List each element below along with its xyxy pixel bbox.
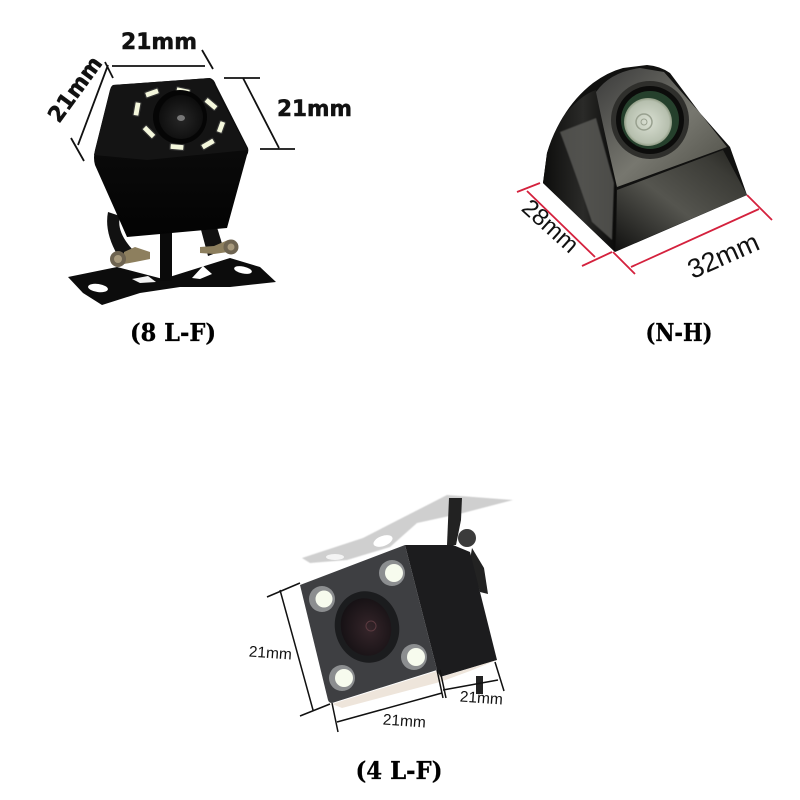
bracket strap and nut (447, 498, 488, 694)
red dimension lines (517, 183, 772, 274)
lens (327, 584, 407, 670)
lower face (616, 150, 747, 251)
lens (611, 81, 689, 159)
side highlight (560, 118, 614, 240)
front face (94, 78, 248, 160)
silver bracket (302, 495, 513, 563)
caption: 4 L-F: (4 L-F) (356, 756, 442, 785)
underside sliver (332, 660, 497, 708)
dimension label: 32mm: 32mm (683, 227, 764, 285)
LEDs (309, 560, 427, 691)
LED ring (133, 87, 226, 151)
panel: 4 L-F camera (248, 495, 513, 785)
dimension label: left: 21mm (248, 644, 292, 663)
left side (543, 90, 616, 252)
dimension label: top: 21mm (121, 30, 197, 55)
dimension lines (267, 583, 504, 732)
camera front face (300, 545, 437, 703)
panel: N-H camera (516, 65, 772, 347)
dimension label: right: 21mm (277, 97, 352, 122)
dimension label: right: 21mm (459, 689, 503, 708)
dimension label: left: 21mm (44, 52, 108, 128)
mounting bracket (68, 212, 276, 305)
camera side (405, 545, 497, 677)
caption: 8 L-F: (8 L-F) (130, 318, 216, 347)
dimension label: 28mm: 28mm (516, 194, 584, 259)
caption: N-H: (N-H) (646, 318, 712, 347)
lens (153, 90, 207, 144)
dimension lines (71, 50, 295, 161)
dimension label: bottom: 21mm (382, 712, 426, 731)
camera body (94, 78, 248, 237)
panel: 8 L-F camera (44, 30, 352, 347)
camera housing (543, 65, 747, 252)
front panel (596, 68, 727, 187)
